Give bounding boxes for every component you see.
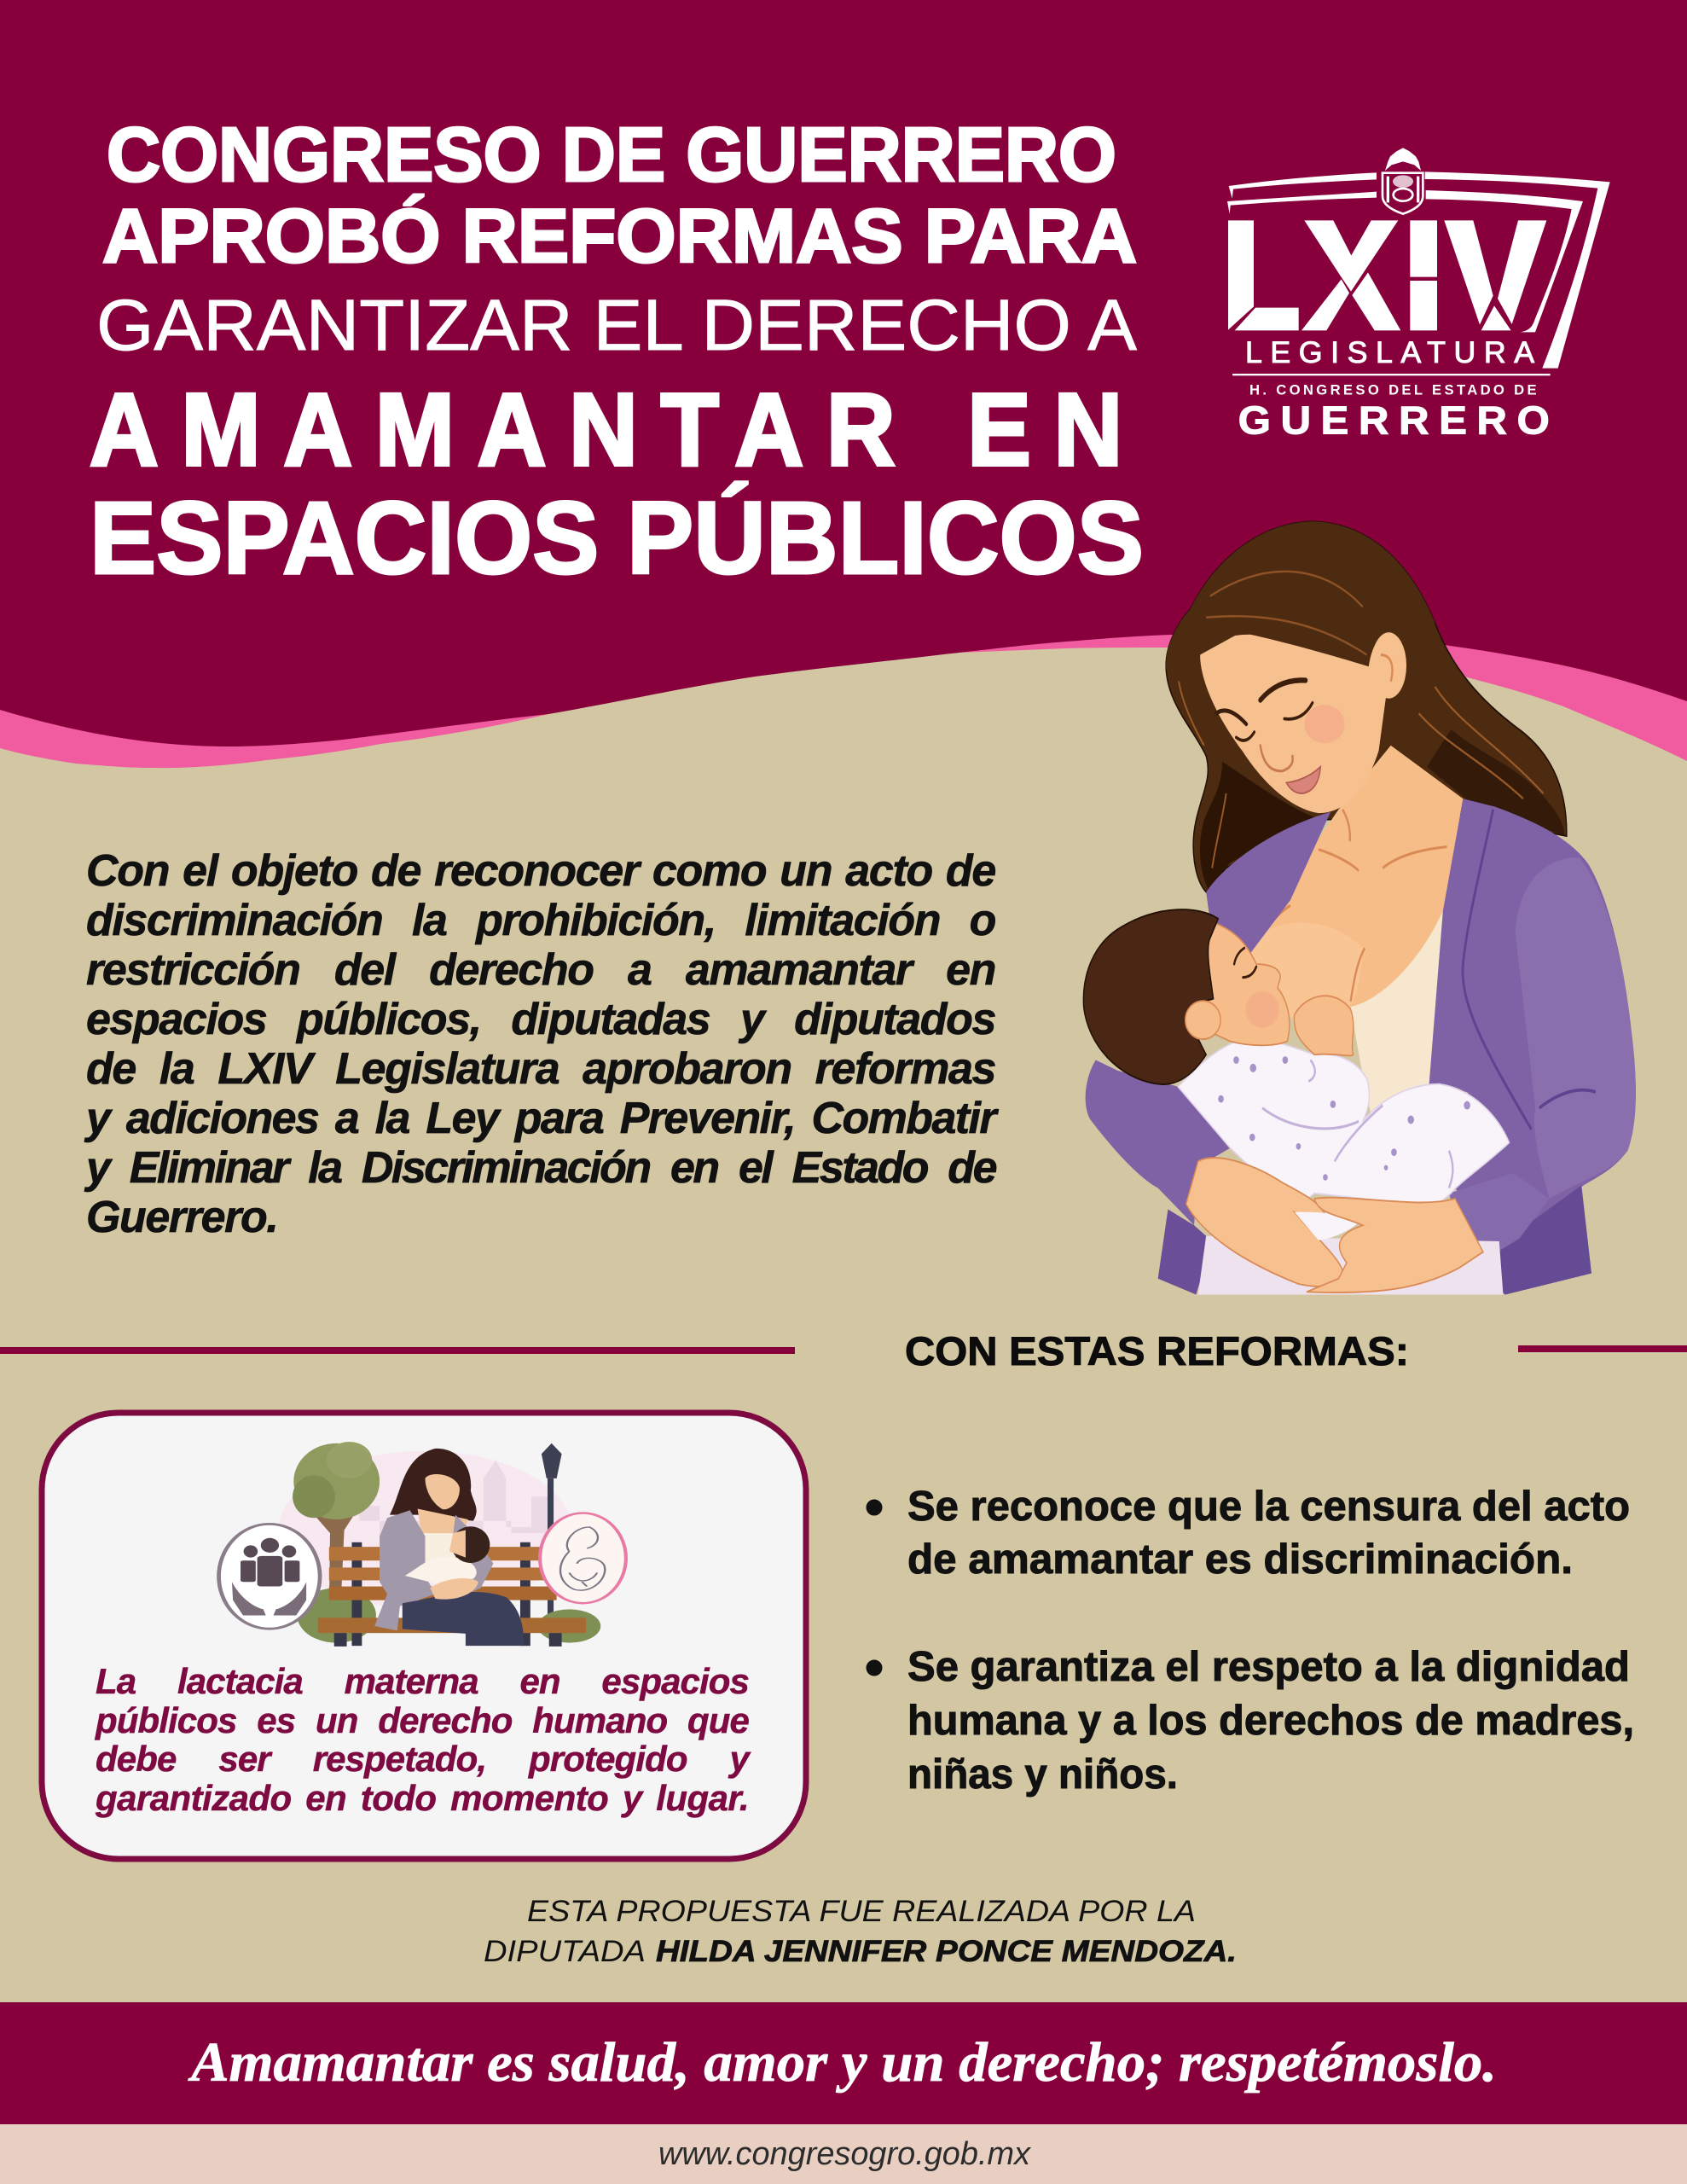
card message text: debe ser respetado, protegido y [96, 1739, 749, 1779]
burgundy header with wave [0, 0, 1687, 746]
mother left hand [1186, 1158, 1342, 1287]
card message text: La lactacia materna en espacios [96, 1661, 749, 1701]
bullet 1 [867, 1484, 1630, 1583]
title: GARANTIZAR EL DERECHO A [96, 285, 1137, 365]
icon: breastfeeding outline [540, 1513, 626, 1603]
title: AMAMANTAR EN [90, 371, 1145, 487]
bullet 1: Se reconoce que la censura del acto [907, 1484, 1630, 1530]
illustration: mother breastfeeding baby [1083, 521, 1636, 1295]
credit: DIPUTADA [484, 1935, 646, 1968]
body paragraph: espacios públicos, diputadas y diputados [86, 995, 995, 1044]
bullet 2: niñas y niños. [907, 1751, 1178, 1798]
body paragraph: discriminación la prohibición, limitación o [86, 896, 995, 945]
baby body [1178, 1039, 1510, 1210]
logo: LXIV Legislatura [1227, 148, 1610, 442]
mother right hand [1307, 1198, 1483, 1292]
body paragraph: de la LXIV Legislatura aprobaron reformas [86, 1044, 995, 1094]
card message text [94, 1661, 751, 1818]
lamp post [542, 1443, 562, 1615]
title: ESPACIOS PÚBLICOS [90, 479, 1144, 595]
body paragraph: Guerrero. [86, 1193, 277, 1242]
card message text: garantizado en todo momento y lugar. [96, 1778, 749, 1818]
footer band [0, 2002, 1687, 2124]
logo: frame lines [1227, 171, 1610, 369]
credit: ESTA PROPUESTA FUE REALIZADA POR LA [527, 1895, 1196, 1928]
logo: wordmark [1232, 336, 1559, 442]
logo: crest [1383, 148, 1423, 214]
slogan: Amamantar es salud, amor y un derecho; respetémoslo. [188, 2031, 1497, 2094]
white cloth [1295, 1212, 1360, 1240]
bullet 1: de amamantar es discriminación. [907, 1536, 1573, 1583]
panel: rounded message card [42, 1413, 806, 1859]
logo: wordmark: H. CONGRESO DEL ESTADO DE [1249, 381, 1537, 398]
card message text: públicos es un derecho humano que [96, 1700, 749, 1740]
bullet list [867, 1484, 1634, 1798]
baby hand [1294, 996, 1354, 1055]
bushes [297, 1588, 600, 1643]
logo: wordmark: GUERRERO [1238, 398, 1559, 442]
body paragraph [84, 846, 1000, 1242]
cardigan [1086, 799, 1636, 1295]
bullet 2: Se garantiza el respeto a la dignidad [907, 1644, 1630, 1690]
title: CONGRESO DE GUERRERO [107, 113, 1116, 198]
bench [318, 1542, 586, 1647]
divider right [1518, 1345, 1687, 1352]
pink wave [0, 597, 1687, 768]
face [1200, 623, 1388, 813]
baby head [1190, 921, 1290, 1045]
illustration: mother on park bench [219, 1442, 626, 1647]
skirt and shirt hem [1198, 1236, 1503, 1295]
hair top [1166, 521, 1435, 692]
eyes, brows, nose and mouth [1216, 680, 1320, 793]
website: www.congresogro.gob.mx [658, 2136, 1032, 2172]
section heading: CON ESTAS REFORMAS: [905, 1328, 1409, 1374]
bullet 2: humana y a los derechos de madres, [907, 1698, 1634, 1744]
body paragraph: restricción del derecho a amamantar en [86, 945, 995, 995]
title: APROBÓ REFORMAS PARA [102, 193, 1137, 278]
background city [279, 1451, 571, 1609]
tree [293, 1442, 380, 1618]
undershirt [1351, 911, 1443, 1113]
credit [484, 1895, 1237, 1968]
bullet 2 [867, 1644, 1634, 1798]
body paragraph: Con el objeto de reconocer como un acto de [86, 846, 995, 896]
icon: community and hands [219, 1524, 320, 1629]
logo: wordmark: LEGISLATURA [1245, 336, 1543, 369]
credit: HILDA JENNIFER PONCE MENDOZA. [656, 1935, 1237, 1968]
divider left [0, 1347, 795, 1354]
body paragraph: y Eliminar la Discriminación en el Estado de [86, 1143, 995, 1193]
body paragraph: y adiciones a la Ley para Prevenir, Combatir [86, 1094, 995, 1143]
logo: LXIV letters [1228, 220, 1546, 330]
hair [1166, 521, 1567, 892]
seated woman [374, 1449, 524, 1646]
chest and neck [1250, 746, 1463, 1028]
ear [1371, 632, 1406, 699]
website band [0, 2124, 1687, 2184]
title [90, 113, 1145, 595]
